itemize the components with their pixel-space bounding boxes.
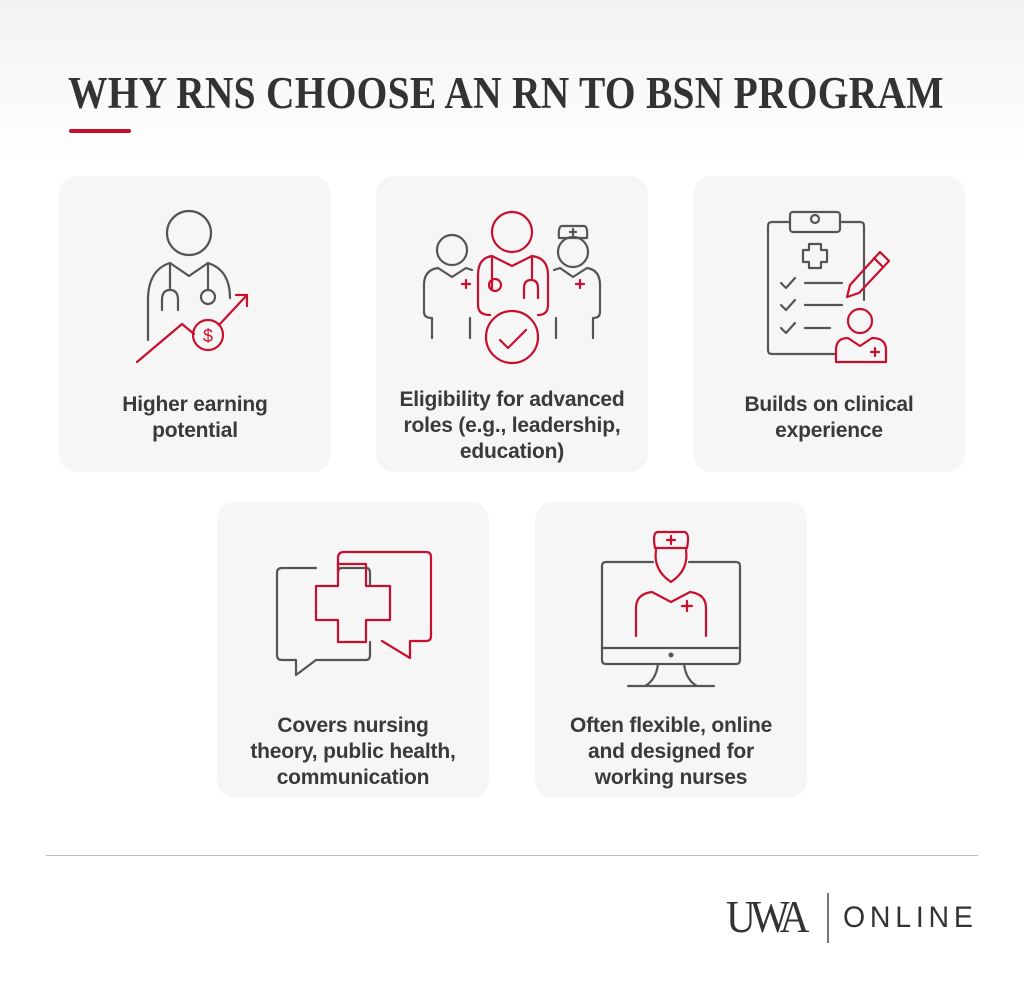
text: theory, public health,: [250, 740, 456, 763]
panel: eligibility: [376, 176, 648, 472]
text: [122, 393, 268, 442]
text: and designed for: [588, 740, 754, 763]
text: Often flexible, online: [570, 714, 772, 737]
icon: speech bubbles with cross: [276, 550, 432, 676]
icon: clipboard with pencil: [766, 210, 890, 364]
panel: flexible online: [535, 502, 807, 798]
panel: higher earning: [59, 176, 331, 472]
panel: covers theory: [217, 502, 489, 798]
text: potential: [152, 419, 238, 442]
text: Covers nursing: [277, 714, 429, 737]
title: WHY RNS CHOOSE AN RN TO BSN PROGRAM: [68, 68, 944, 118]
text: roles (e.g., leadership,: [404, 414, 620, 437]
text: Builds on clinical: [744, 393, 914, 416]
text: [250, 714, 456, 789]
text: experience: [775, 419, 883, 442]
icon: nurse on monitor: [600, 530, 742, 688]
icon: doctor with rising dollar: [136, 210, 248, 364]
text: communication: [277, 766, 429, 789]
text: Eligibility for advanced: [399, 388, 625, 411]
text: [399, 388, 625, 463]
text: working nurses: [595, 766, 747, 789]
text: education): [460, 440, 564, 463]
icon: doctor with rising dollar: $: [203, 326, 213, 346]
text: Higher earning: [122, 393, 268, 416]
text: [744, 393, 914, 442]
divider: [46, 855, 978, 856]
logo: UWA online: UWA: [726, 891, 804, 942]
title underline: [69, 129, 131, 133]
logo: UWA online: [726, 891, 978, 943]
icon: team with check: [422, 210, 602, 364]
logo: UWA online: ONLINE: [843, 901, 978, 934]
text: [570, 714, 772, 789]
panel: clinical experience: [693, 176, 965, 472]
